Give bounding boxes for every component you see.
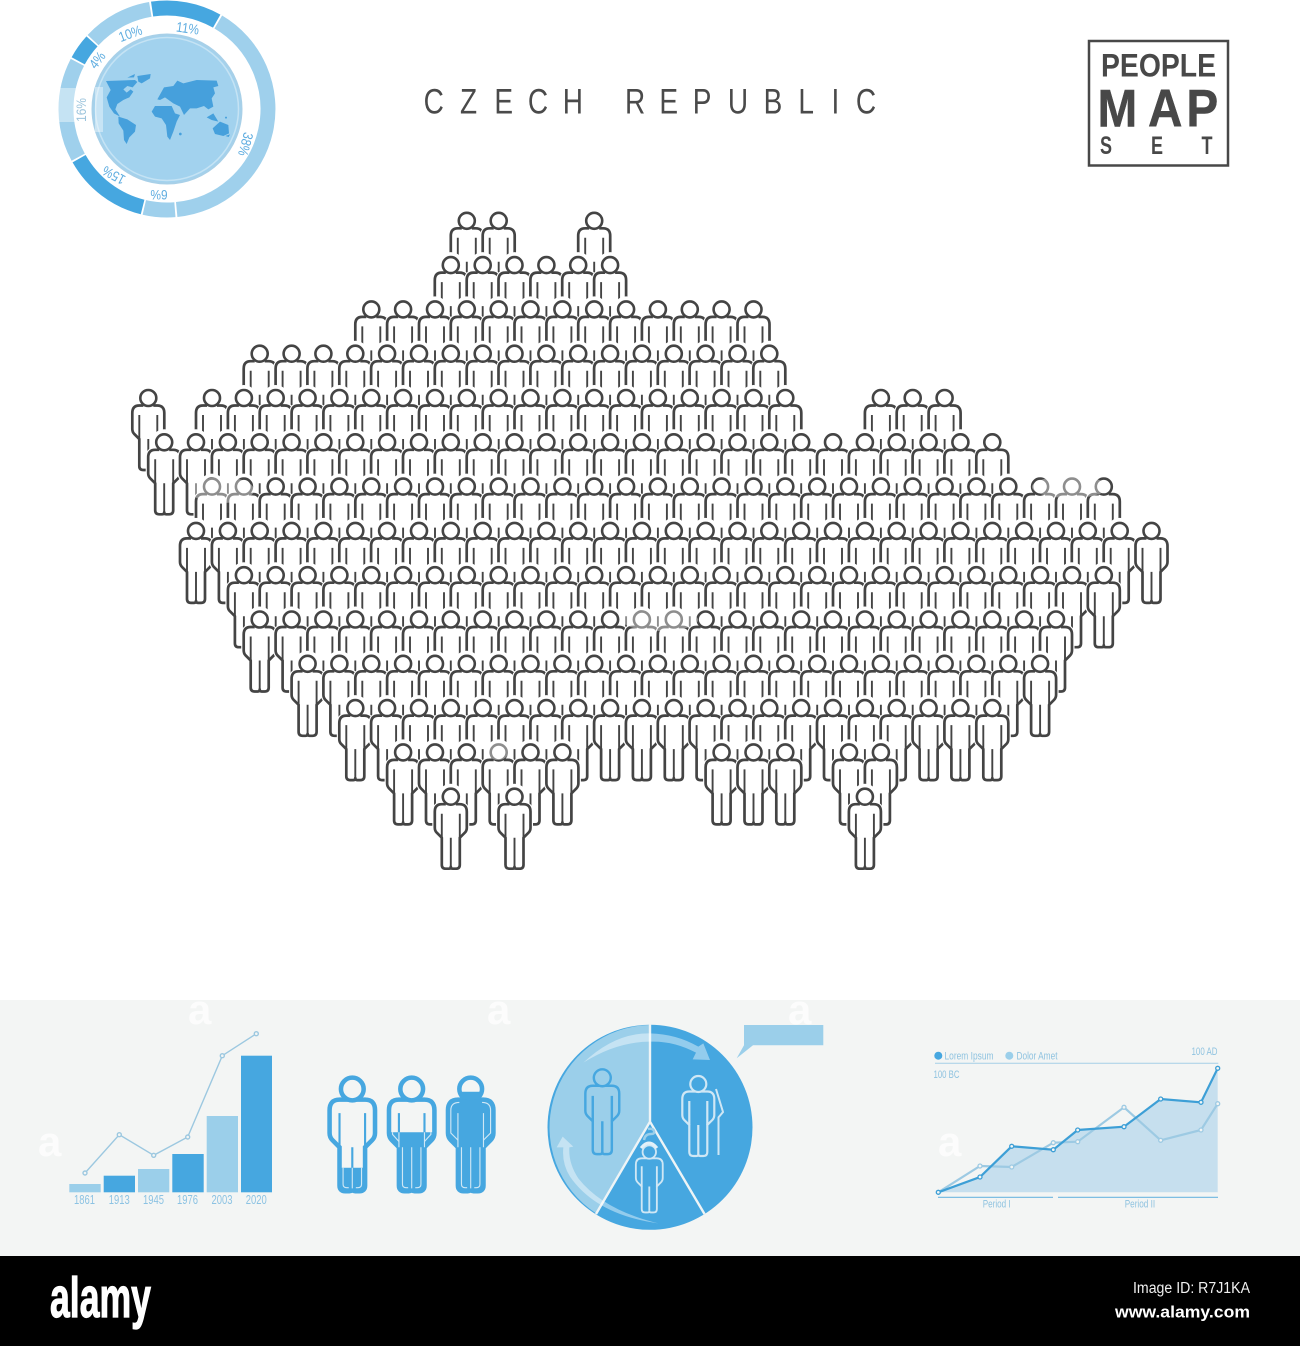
donut percent labels: 10%	[116, 22, 145, 45]
faint watermark patches over the map	[190, 476, 1108, 760]
map row 6	[148, 429, 1008, 514]
icon: three person fill-level figures	[330, 1078, 493, 1191]
year labels: 1976	[177, 1193, 198, 1207]
people map: Czech Republic silhouette made of person icons	[132, 208, 1167, 869]
adult figure	[585, 1069, 619, 1154]
map row 1	[451, 208, 610, 293]
year labels: 2003	[212, 1193, 233, 1207]
band watermark letters: a	[788, 986, 812, 1033]
year labels: 1913	[109, 1193, 130, 1207]
chart legend: Lorem Ipsum	[944, 1050, 994, 1062]
badge: People Map Set: SET	[1100, 131, 1213, 160]
panel: bottom statistics band	[0, 1000, 1300, 1256]
bars	[69, 1056, 272, 1192]
map row 2	[435, 252, 626, 337]
elderly figure with cane	[682, 1076, 723, 1156]
year labels: 1861	[74, 1193, 95, 1207]
faint watermark band over donut	[58, 87, 103, 132]
cycle arrows	[557, 1033, 710, 1223]
chart legend: Dolor Amet	[1016, 1050, 1058, 1062]
pie chart: age groups	[548, 1024, 823, 1230]
donut percent labels: 6%	[150, 187, 168, 203]
area under series	[938, 1068, 1218, 1192]
band watermark letters	[38, 986, 962, 1165]
trend line	[83, 1032, 258, 1175]
donut percent labels: 38%	[235, 131, 257, 158]
band watermark letters: a	[487, 986, 511, 1033]
footer logo: alamy	[50, 1266, 151, 1330]
chart legend: 100 AD	[1192, 1046, 1218, 1058]
figure: full fill	[448, 1078, 493, 1191]
badge: People Map Set: MAP	[1097, 78, 1218, 138]
icon: world donut chart	[58, 8, 268, 210]
footer image id: Image ID: R7J1KA	[1133, 1280, 1251, 1297]
map row 3	[355, 296, 770, 381]
line chart	[934, 1046, 1220, 1211]
donut percent labels: 4%	[86, 48, 109, 72]
figure: half fill	[389, 1078, 434, 1191]
figure: low fill	[330, 1078, 375, 1191]
map row 10	[244, 606, 1072, 692]
period axis: Period I	[983, 1199, 1011, 1211]
donut percent labels: 15%	[99, 162, 128, 188]
globe circle	[92, 34, 242, 184]
map row 14	[435, 784, 881, 869]
light series	[938, 1102, 1220, 1192]
donut percent labels: 16%	[73, 98, 89, 122]
title: CZECHREPUBLIC	[424, 81, 876, 121]
dark series	[936, 1066, 1220, 1194]
badge: People Map Set	[1089, 41, 1228, 166]
top rule	[935, 1062, 1218, 1064]
pie dividers	[596, 1024, 704, 1214]
speech bubble	[737, 1025, 823, 1058]
bar chart with trend line	[69, 1032, 272, 1207]
band watermark letters: a	[188, 986, 212, 1033]
pie base	[548, 1025, 752, 1230]
child figure	[636, 1129, 663, 1212]
map row 4	[244, 341, 785, 426]
panel: black footer	[0, 1256, 1300, 1346]
world map continents	[106, 74, 230, 144]
year labels: 1945	[143, 1193, 164, 1207]
period axis	[938, 1197, 1218, 1211]
map row 9	[228, 562, 1120, 647]
donut percent labels	[73, 19, 257, 203]
map row 11	[292, 651, 1056, 736]
donut ring segments	[66, 8, 268, 210]
map row 7	[196, 474, 1120, 559]
chart legend	[934, 1046, 1218, 1081]
badge: People Map Set: PEOPLE	[1101, 48, 1216, 84]
footer url: www.alamy.com	[1114, 1302, 1250, 1322]
map row 12	[339, 695, 1008, 780]
year labels	[74, 1193, 267, 1207]
donut percent labels: 11%	[175, 19, 201, 38]
map row 13	[387, 739, 897, 824]
pie light segment	[550, 1025, 650, 1213]
band watermark letters: a	[38, 1118, 62, 1165]
year labels: 2020	[246, 1193, 267, 1207]
period axis: Period II	[1125, 1199, 1155, 1211]
map row 8	[180, 518, 1168, 603]
chart legend: 100 BC	[934, 1069, 960, 1081]
map row 5	[132, 385, 961, 470]
band watermark letters: a	[938, 1118, 962, 1165]
